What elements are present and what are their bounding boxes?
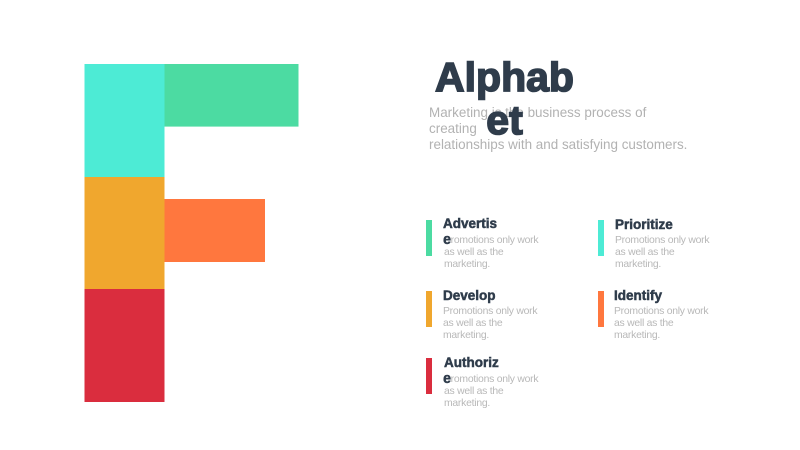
amber marker bar: [426, 291, 432, 327]
body text: marketing.: [615, 259, 661, 270]
item: Authoriz: [426, 355, 538, 409]
body text: Promotions only work: [444, 235, 538, 246]
item: Prioritize: [598, 217, 710, 270]
body text: Promotions only work: [615, 235, 709, 246]
heading: Advertis: [443, 216, 497, 231]
description text: creating: [429, 121, 477, 136]
body text: as well as the: [444, 386, 503, 397]
description text: [429, 105, 687, 152]
body text: marketing.: [614, 330, 660, 341]
orange marker bar: [598, 291, 604, 327]
heading: Prioritize: [615, 217, 673, 232]
F top arm: green block: [164, 64, 298, 127]
F stem: red block: [84, 289, 164, 402]
item: Develop: [426, 288, 538, 341]
body text: [615, 235, 710, 270]
body text: Promotions only work: [444, 374, 538, 385]
body text: marketing.: [444, 259, 490, 270]
item: Advertis: [426, 216, 538, 270]
red marker bar: [426, 358, 432, 394]
body text: Promotions only work: [443, 306, 537, 317]
body text: as well as the: [444, 247, 503, 258]
heading: Authoriz: [444, 355, 499, 370]
teal marker bar: [598, 220, 604, 256]
body text: [444, 374, 538, 409]
body text: as well as the: [443, 318, 502, 329]
title: Alphab: [435, 54, 574, 100]
F middle arm: orange block: [164, 199, 265, 262]
body text: as well as the: [615, 247, 674, 258]
body text: [443, 306, 538, 341]
title: [434, 54, 574, 143]
body text: [614, 306, 708, 341]
title: et: [486, 97, 523, 143]
item: Identify: [598, 288, 708, 341]
overlapping wrapped letter: e: [443, 232, 451, 248]
body text: Promotions only work: [614, 306, 708, 317]
F stem: teal block: [84, 64, 164, 177]
overlapping wrapped letter: e: [443, 371, 451, 387]
heading: Identify: [614, 288, 662, 303]
description text: relationships with and satisfying customers.: [429, 137, 687, 152]
description text: Marketing is the business process of: [429, 105, 646, 120]
body text: [444, 235, 538, 270]
body text: marketing.: [444, 398, 490, 409]
green marker bar: [426, 220, 432, 256]
body text: marketing.: [443, 330, 489, 341]
body text: as well as the: [614, 318, 673, 329]
F stem: amber block: [84, 177, 164, 289]
heading: Develop: [443, 288, 496, 303]
